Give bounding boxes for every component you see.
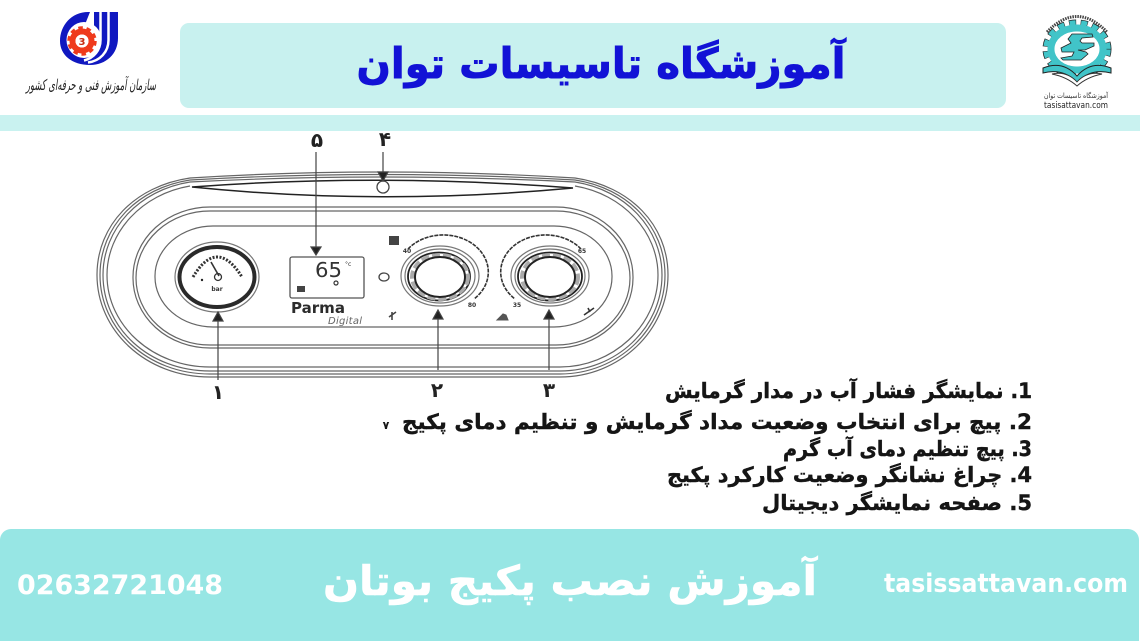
callout numbers bbox=[212, 127, 555, 404]
tap icon bbox=[497, 314, 508, 320]
logo caption persian: آموزشگاه تاسیسات توان bbox=[1044, 91, 1109, 100]
brand sub name: Digital bbox=[328, 316, 362, 327]
pressure gauge bbox=[175, 242, 259, 312]
knob: hot water bbox=[501, 235, 589, 309]
arrow 3 bbox=[544, 310, 554, 370]
winter mode icon bbox=[389, 312, 396, 320]
footer panel bbox=[0, 529, 1139, 641]
scale min: 40 bbox=[403, 248, 411, 255]
header band bbox=[0, 115, 1140, 131]
knob: heating bbox=[401, 235, 488, 309]
item 1: 1. نمایشگر فشار آب در مدار گرمایش bbox=[665, 378, 1032, 403]
item 4: 4. چراغ نشانگر وضعیت کارکرد پکیج bbox=[667, 462, 1032, 487]
logo: tasisat tavan bbox=[1043, 16, 1111, 111]
top slot bbox=[192, 180, 573, 197]
brand name: Parma bbox=[291, 299, 345, 317]
phone number: 02632721048 bbox=[17, 570, 223, 601]
title: آموزشگاه تاسیسات توان bbox=[356, 38, 847, 89]
arrow 5 bbox=[311, 152, 321, 255]
scale max: 80 bbox=[468, 302, 476, 309]
item 2: 2. پیچ برای انتخاب وضعیت مداد گرمایش و تنظیم دمای پکیج bbox=[402, 409, 1032, 434]
title panel bbox=[180, 23, 1006, 108]
status lamp bbox=[377, 181, 389, 193]
number 1: ۱ bbox=[212, 380, 224, 404]
number 2: ۲ bbox=[431, 378, 443, 402]
scale min: 35 bbox=[513, 302, 521, 309]
item 5: 5. صفحه نمایشگر دیجیتال bbox=[762, 490, 1032, 515]
gauge unit: bar bbox=[211, 286, 223, 293]
number 3: ۳ bbox=[543, 378, 555, 402]
display unit: °c bbox=[345, 261, 351, 268]
logo: technical and vocational organization: 3 bbox=[79, 37, 86, 48]
power symbol bbox=[379, 273, 389, 281]
digital display bbox=[290, 257, 364, 298]
logo: technical and vocational organization bbox=[25, 12, 156, 94]
footer title: آموزش نصب پکیج بوتان bbox=[323, 556, 818, 606]
logo caption url: tasisattavan.com bbox=[1044, 101, 1108, 111]
arrow 4 bbox=[378, 152, 388, 181]
heating icon bbox=[389, 236, 399, 245]
inner rings bbox=[133, 207, 633, 348]
summer mode icon bbox=[584, 308, 594, 315]
item 3: 3. پیچ تنظیم دمای آب گرم bbox=[783, 436, 1032, 461]
outer casing outline bbox=[97, 172, 668, 377]
number 5: ۵ bbox=[311, 128, 323, 152]
arrow 2 bbox=[433, 310, 443, 370]
number 4: ۴ bbox=[379, 127, 391, 151]
callouts bbox=[213, 152, 554, 380]
scale max: 65 bbox=[578, 248, 586, 255]
display reading: 65 bbox=[315, 258, 342, 282]
arrow 1 bbox=[213, 312, 223, 380]
logo caption: سازمان آموزش فنی و حرفه‌ای کشور bbox=[25, 75, 156, 94]
item 2 trailing mark: ۷ bbox=[383, 419, 390, 432]
legend list bbox=[383, 378, 1032, 515]
panel: boiler control diagram bbox=[97, 172, 668, 377]
